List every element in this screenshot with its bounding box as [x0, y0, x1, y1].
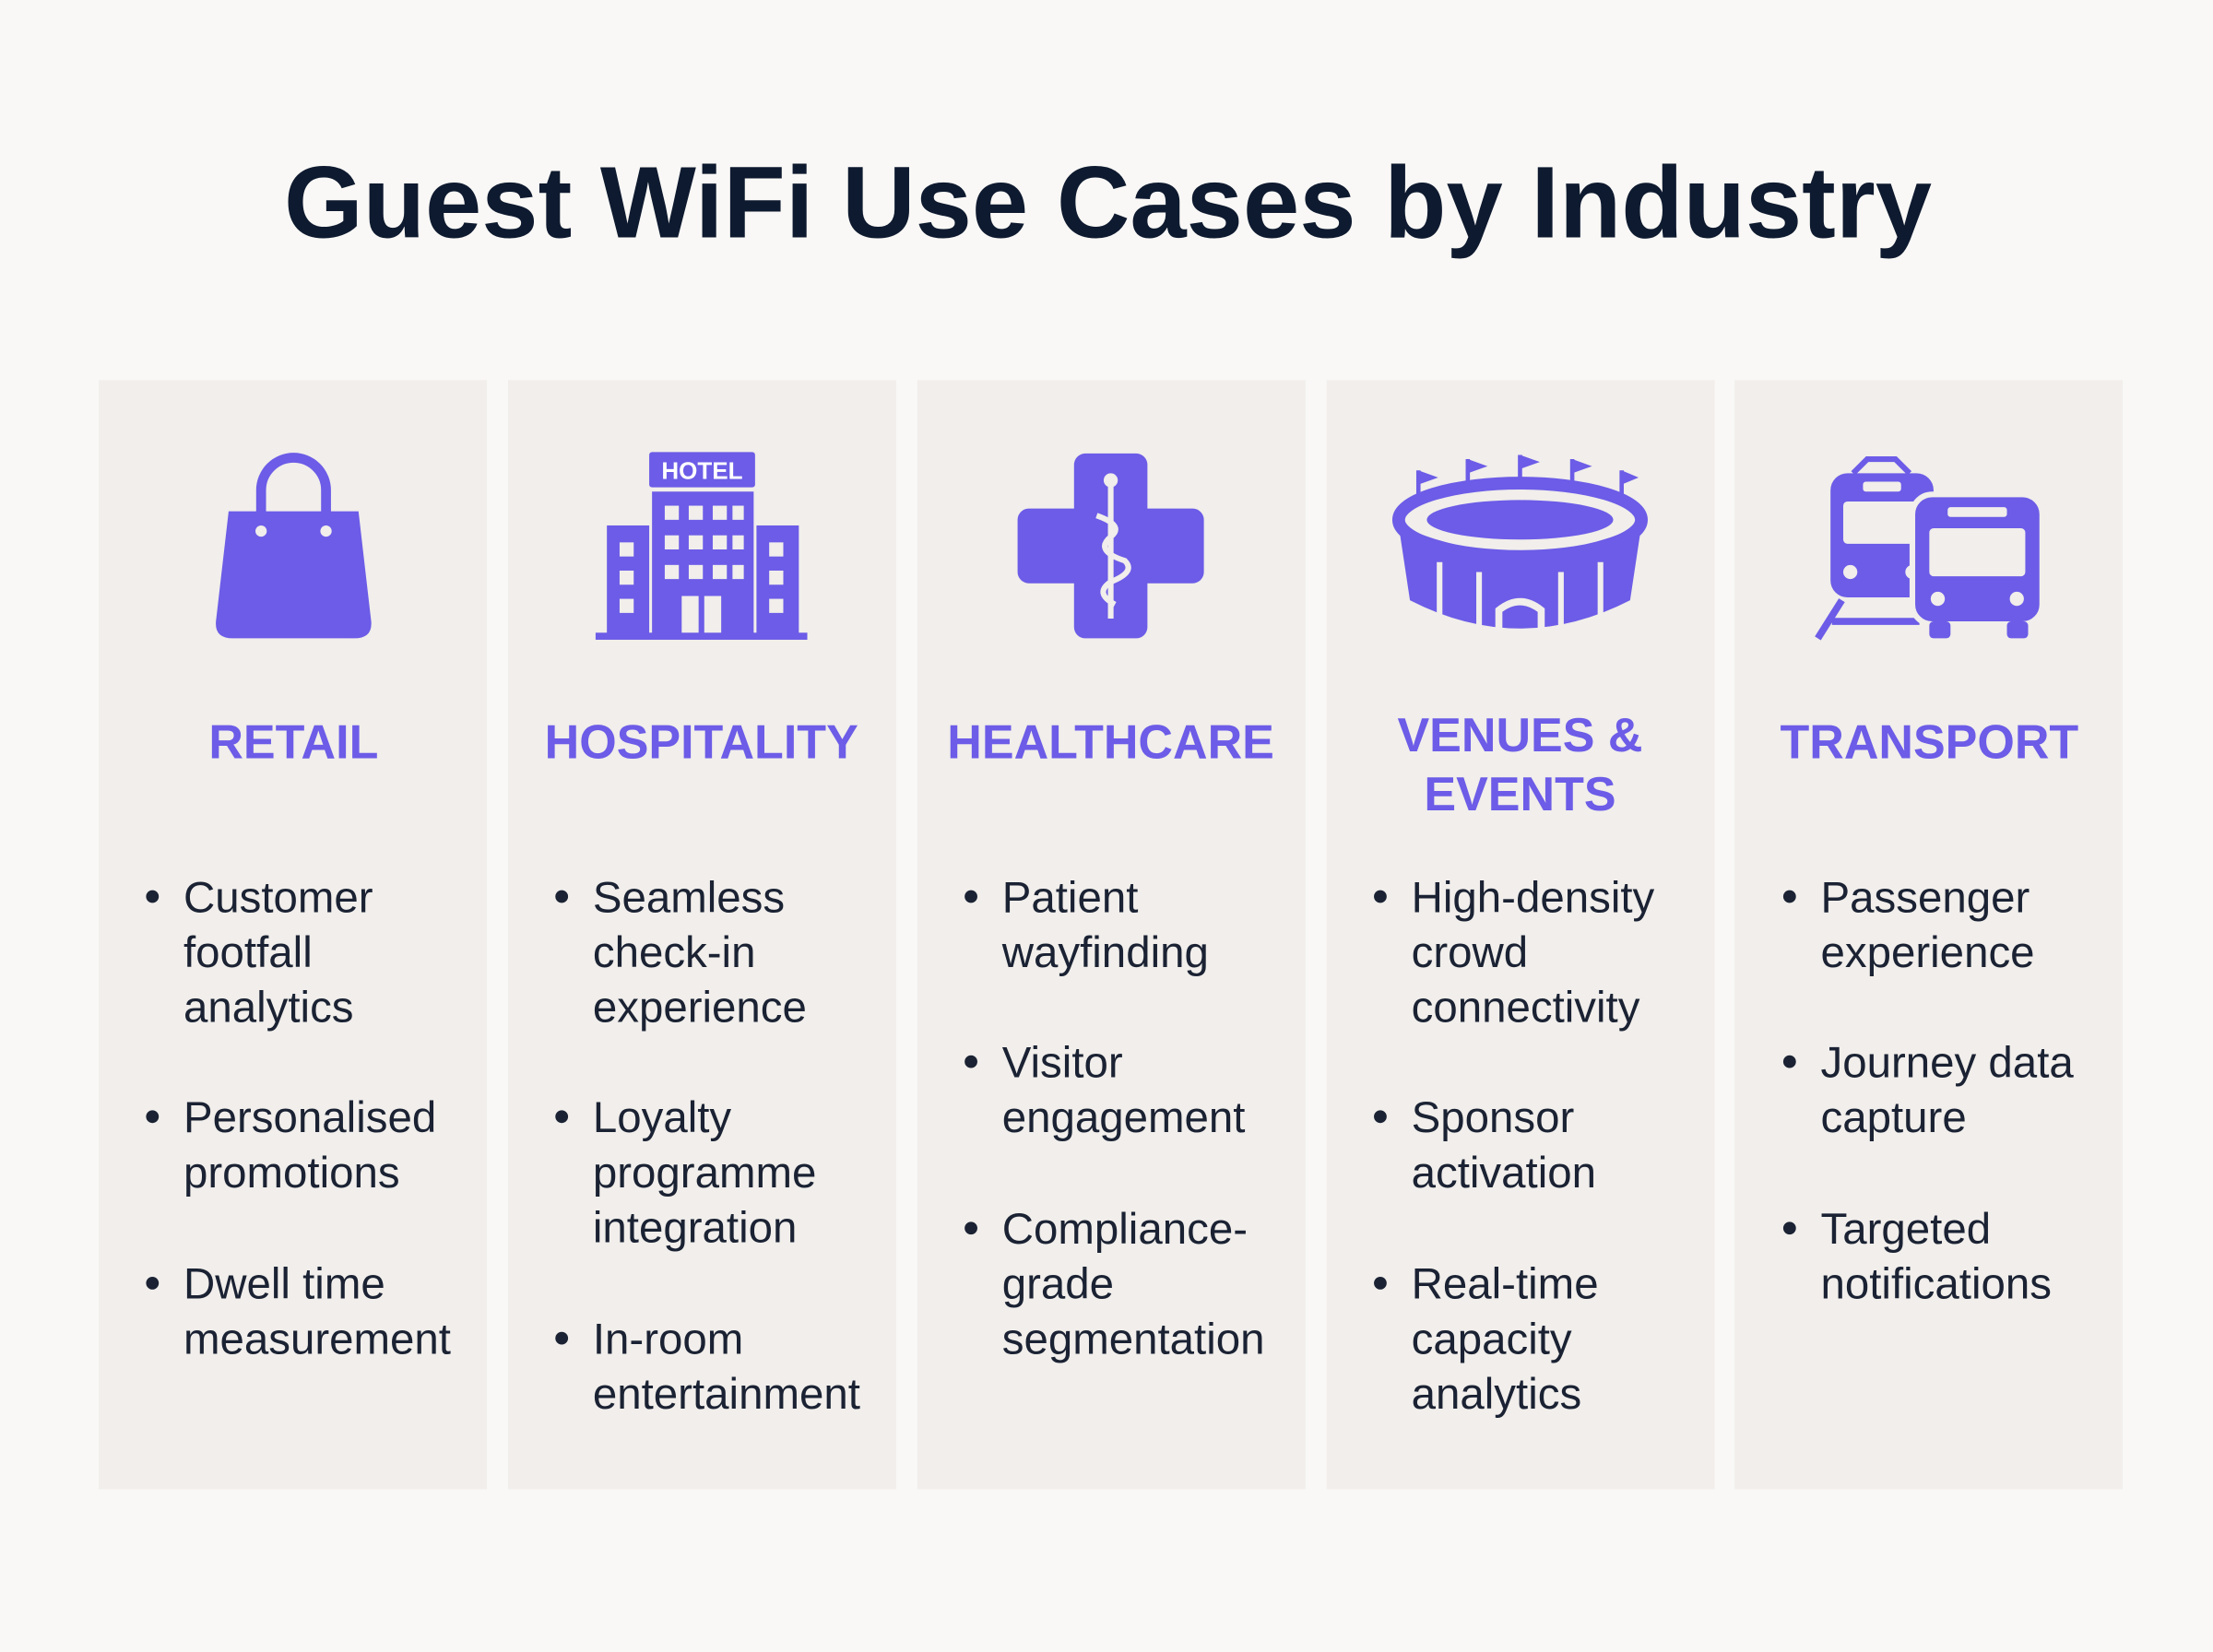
- bullets: retail: [146, 873, 451, 1363]
- panel: venues & events: [1327, 380, 1715, 1489]
- heading: venues & events: VENUES &: [1397, 709, 1642, 762]
- bullets: healthcare: engagement: [1002, 1093, 1246, 1142]
- icon: hotel: [596, 452, 808, 640]
- bullets: retail: Customer: [183, 873, 373, 922]
- bullets: transport: Journey data: [1820, 1038, 2074, 1087]
- bullets: healthcare: grade: [1002, 1260, 1114, 1309]
- bullets: transport: notifications: [1820, 1260, 2052, 1309]
- bullets: hospitality: check-in: [593, 928, 755, 977]
- title: Guest WiFi Use Cases by Industry: [284, 147, 1932, 260]
- bullets: hospitality: experience: [593, 984, 807, 1032]
- bullets: healthcare: Patient: [1002, 873, 1138, 922]
- bullets: hospitality: Seamless: [593, 873, 785, 922]
- bullets: venues: capacity: [1412, 1315, 1572, 1363]
- bullets: healthcare: segmentation: [1002, 1315, 1265, 1363]
- bullets: transport: capture: [1820, 1093, 1967, 1142]
- panel: retail: [99, 380, 487, 1489]
- bullets: hospitality: integration: [593, 1204, 797, 1253]
- bullets: transport: Passenger: [1820, 873, 2030, 922]
- bullets: hospitality: Loyalty: [593, 1093, 731, 1142]
- bullets: venues: crowd: [1412, 928, 1528, 977]
- bullets: venues: [1374, 873, 1655, 1419]
- heading: hospitality: HOSPITALITY: [545, 716, 858, 770]
- bullets: healthcare: wayfinding: [1001, 928, 1209, 977]
- heading: retail: RETAIL: [208, 716, 378, 770]
- bullets: venues: High-density: [1412, 873, 1655, 922]
- bullets: hospitality: [555, 873, 860, 1419]
- bullets: venues: activation: [1412, 1149, 1596, 1198]
- bullets: venues: Sponsor: [1412, 1093, 1575, 1142]
- bullets: retail: Dwell time: [183, 1260, 385, 1309]
- icon: hotel: HOTEL: [661, 456, 743, 484]
- bullets: healthcare: [964, 873, 1265, 1363]
- bullets: venues: connectivity: [1412, 984, 1640, 1032]
- heading: venues & events: EVENTS: [1424, 768, 1616, 821]
- bullets: healthcare: Compliance-: [1002, 1205, 1248, 1254]
- icon: train and bus: [1817, 459, 2042, 638]
- bullets: retail: Personalised: [183, 1093, 436, 1142]
- bullets: transport: Targeted: [1820, 1205, 1991, 1254]
- bullets: hospitality: entertainment: [593, 1370, 860, 1419]
- bullets: transport: experience: [1820, 928, 2035, 977]
- bullets: hospitality: In-room: [593, 1315, 743, 1363]
- bullets: transport: [1783, 873, 2074, 1309]
- bullets: healthcare: Visitor: [1002, 1038, 1123, 1087]
- heading: transport: TRANSPORT: [1780, 716, 2078, 770]
- bullets: venues: Real-time: [1412, 1260, 1599, 1309]
- panel: hospitality: [508, 380, 896, 1489]
- heading: venues & events: [1397, 709, 1642, 821]
- icon: shopping bag: [216, 458, 372, 638]
- bullets: retail: promotions: [183, 1149, 400, 1198]
- bullets: retail: measurement: [183, 1315, 451, 1363]
- bullets: retail: footfall: [183, 928, 313, 977]
- icon: medical cross: [1018, 454, 1204, 638]
- bullets: retail: analytics: [183, 984, 354, 1032]
- bullets: venues: analytics: [1412, 1370, 1581, 1419]
- panel: healthcare: [917, 380, 1306, 1489]
- bullets: hospitality: programme: [593, 1149, 816, 1198]
- panel: transport: [1734, 380, 2123, 1489]
- heading: healthcare: HEALTHCARE: [947, 716, 1274, 770]
- icon: stadium: [1399, 454, 1641, 635]
